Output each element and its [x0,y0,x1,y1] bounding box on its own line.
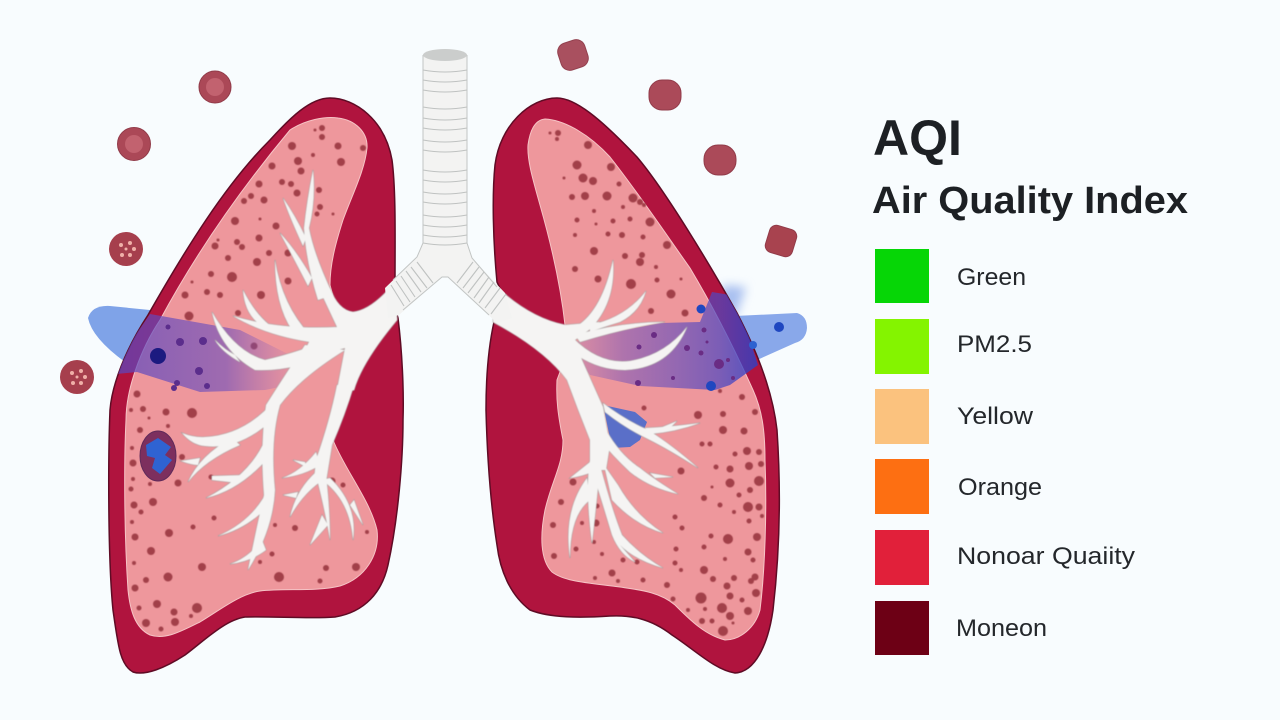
right lung [486,98,779,673]
particle [704,145,736,175]
floating particles left [60,71,231,394]
particle [555,37,591,73]
right lung inner tissue [528,119,766,640]
legend [872,110,1188,655]
particle [199,71,231,103]
left bronchial tree [181,170,397,570]
airway body [385,55,512,323]
right band dark and blue particles [635,304,784,391]
legend item: Yellow [875,389,1034,444]
lesion with blue patches [140,431,176,481]
left lung outer wall [109,98,403,673]
right lung outer wall [486,98,779,673]
right lung particle specks [548,130,764,636]
legend item: Orange: Orange [958,474,1042,501]
legend item: Orange [875,459,1042,514]
right bronchial tree [493,260,700,568]
legend item: Moneon [875,601,1047,655]
left blue pollution plume outside lung [88,306,160,375]
legend item: Moneon: Moneon [956,615,1047,642]
legend item: Yellow: Yellow [957,403,1034,430]
legend item: PM2.5 [875,319,1032,374]
cartilage rings [391,70,506,314]
legend item: Green [875,249,1026,303]
airway outline [393,55,497,315]
heading: AQI: AQI [873,110,962,166]
left lung [109,98,403,673]
particle [118,128,150,160]
trachea top opening [423,49,467,61]
right blue pollution plume outside lung [706,285,807,360]
legend item: Nonoar Quaiity: Nonoar Quaiity [957,543,1135,570]
heading: Air Quality Index: Air Quality Index [872,180,1188,222]
left band dark particles [150,324,210,391]
legend item: Nonoar Quaiity [875,530,1135,585]
trachea and main bronchi [385,49,512,323]
blue patch in right bronchus [603,405,647,448]
left purple pollution band [116,314,300,392]
legend item: PM2.5: PM2.5 [957,331,1032,358]
floating particles right [555,37,798,258]
right purple pollution band [565,292,758,390]
particle [764,224,798,258]
left lung inner tissue [125,118,377,637]
particle with seeds [60,360,94,394]
legend item: Green: Green [957,264,1026,291]
left lung particle specks [128,125,369,632]
particle [649,80,681,110]
particle with seeds [109,232,143,266]
